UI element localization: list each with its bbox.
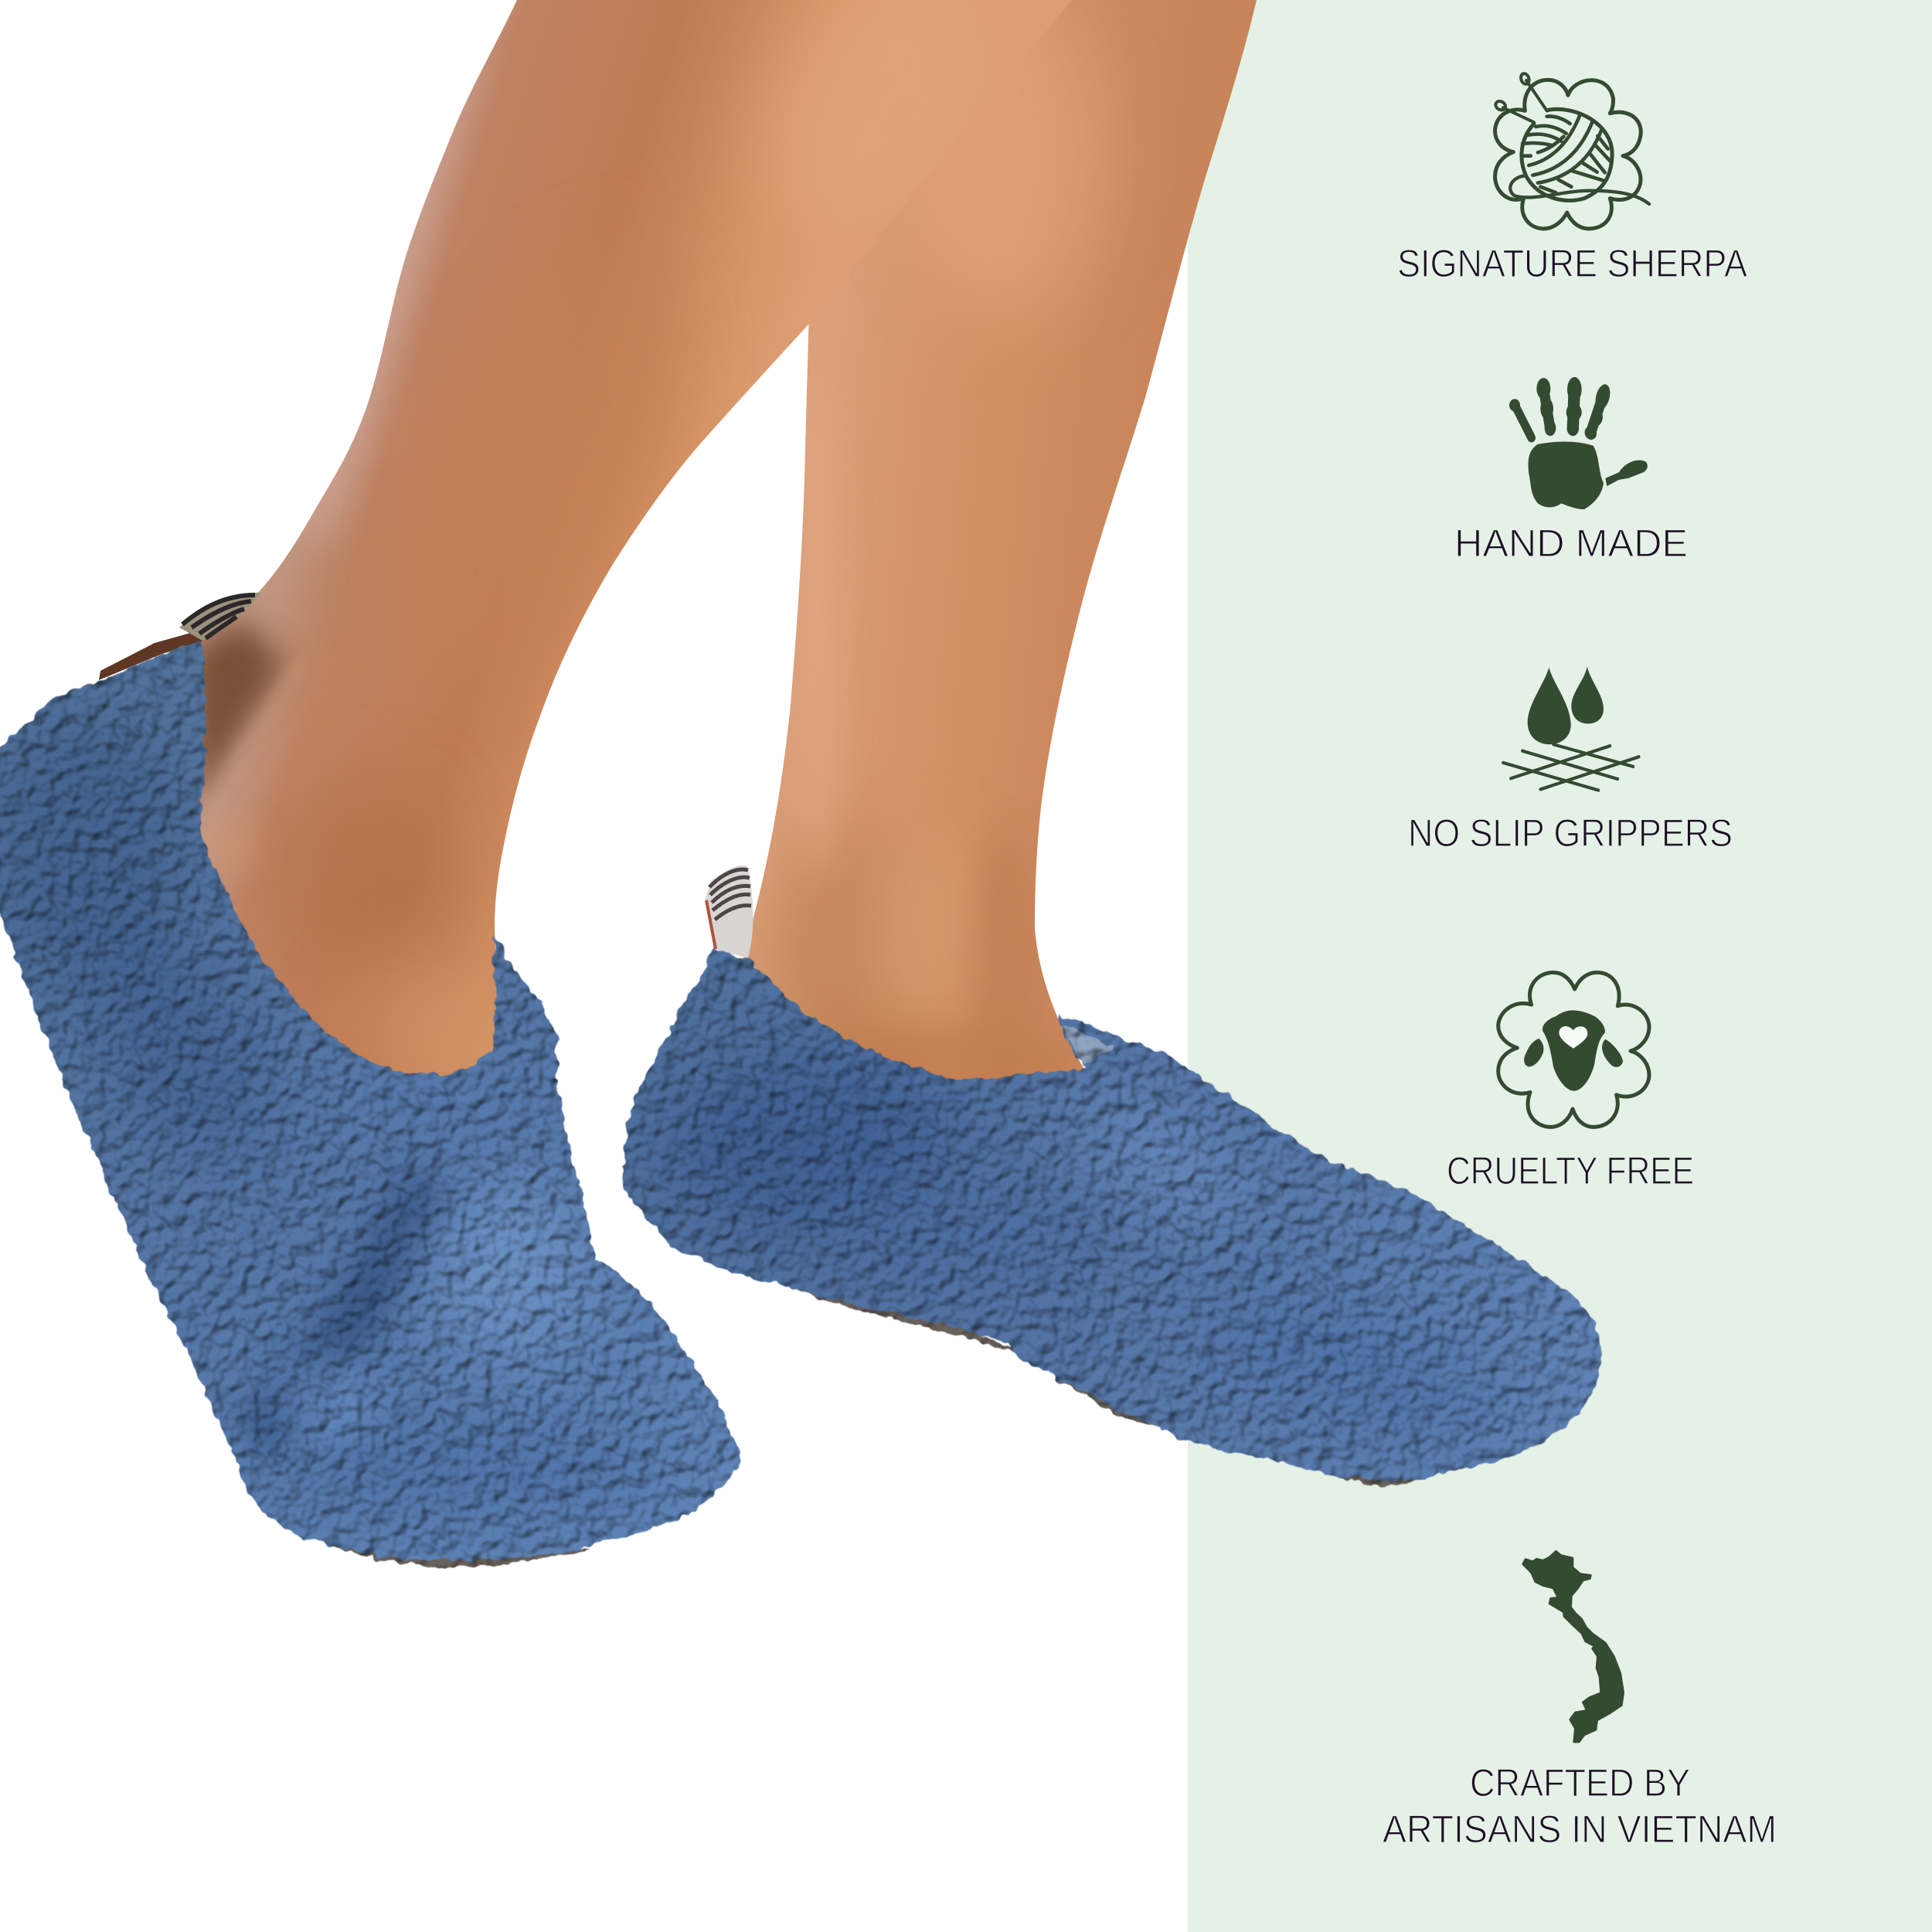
label: no slip grippers: NO SLIP GRIPPERS xyxy=(1408,811,1733,855)
panel: features background xyxy=(1188,0,1932,1932)
icon: drops over grip mesh xyxy=(1503,667,1639,791)
leg: front leg xyxy=(170,0,1082,1113)
icon: sheep in flower outline xyxy=(1498,972,1649,1127)
feature: signature sherpa xyxy=(1397,73,1748,285)
tab: front slipper woven label and leather patch xyxy=(99,593,261,680)
label: crafted by artisans in vietnam: ARTISANS IN VIETNAM xyxy=(1383,1808,1777,1851)
label: crafted by artisans in vietnam: CRAFTED BY xyxy=(1470,1761,1690,1804)
tab: rear slipper label xyxy=(705,866,753,958)
label: signature sherpa: SIGNATURE SHERPA xyxy=(1397,242,1748,285)
label: cruelty free: CRUELTY FREE xyxy=(1447,1149,1694,1192)
slipper: front foot blue sherpa xyxy=(0,618,773,1592)
photo: legs wearing blue sherpa slippers xyxy=(0,0,1623,1592)
feature: crafted by artisans in vietnam xyxy=(1383,1551,1777,1851)
icon: map of Vietnam xyxy=(1523,1551,1624,1742)
feature: no slip grippers xyxy=(1408,667,1733,855)
icon: yarn ball with needles xyxy=(1494,73,1649,229)
label: crafted by artisans in vietnam xyxy=(1383,1761,1777,1851)
slipper: rear foot blue sherpa xyxy=(603,927,1623,1499)
feature: cruelty free xyxy=(1447,972,1694,1192)
icon: hand print xyxy=(1509,377,1648,509)
feature: hand made xyxy=(1454,377,1688,565)
label: hand made: HAND MADE xyxy=(1454,522,1688,565)
leg: rear leg xyxy=(734,0,1275,1128)
